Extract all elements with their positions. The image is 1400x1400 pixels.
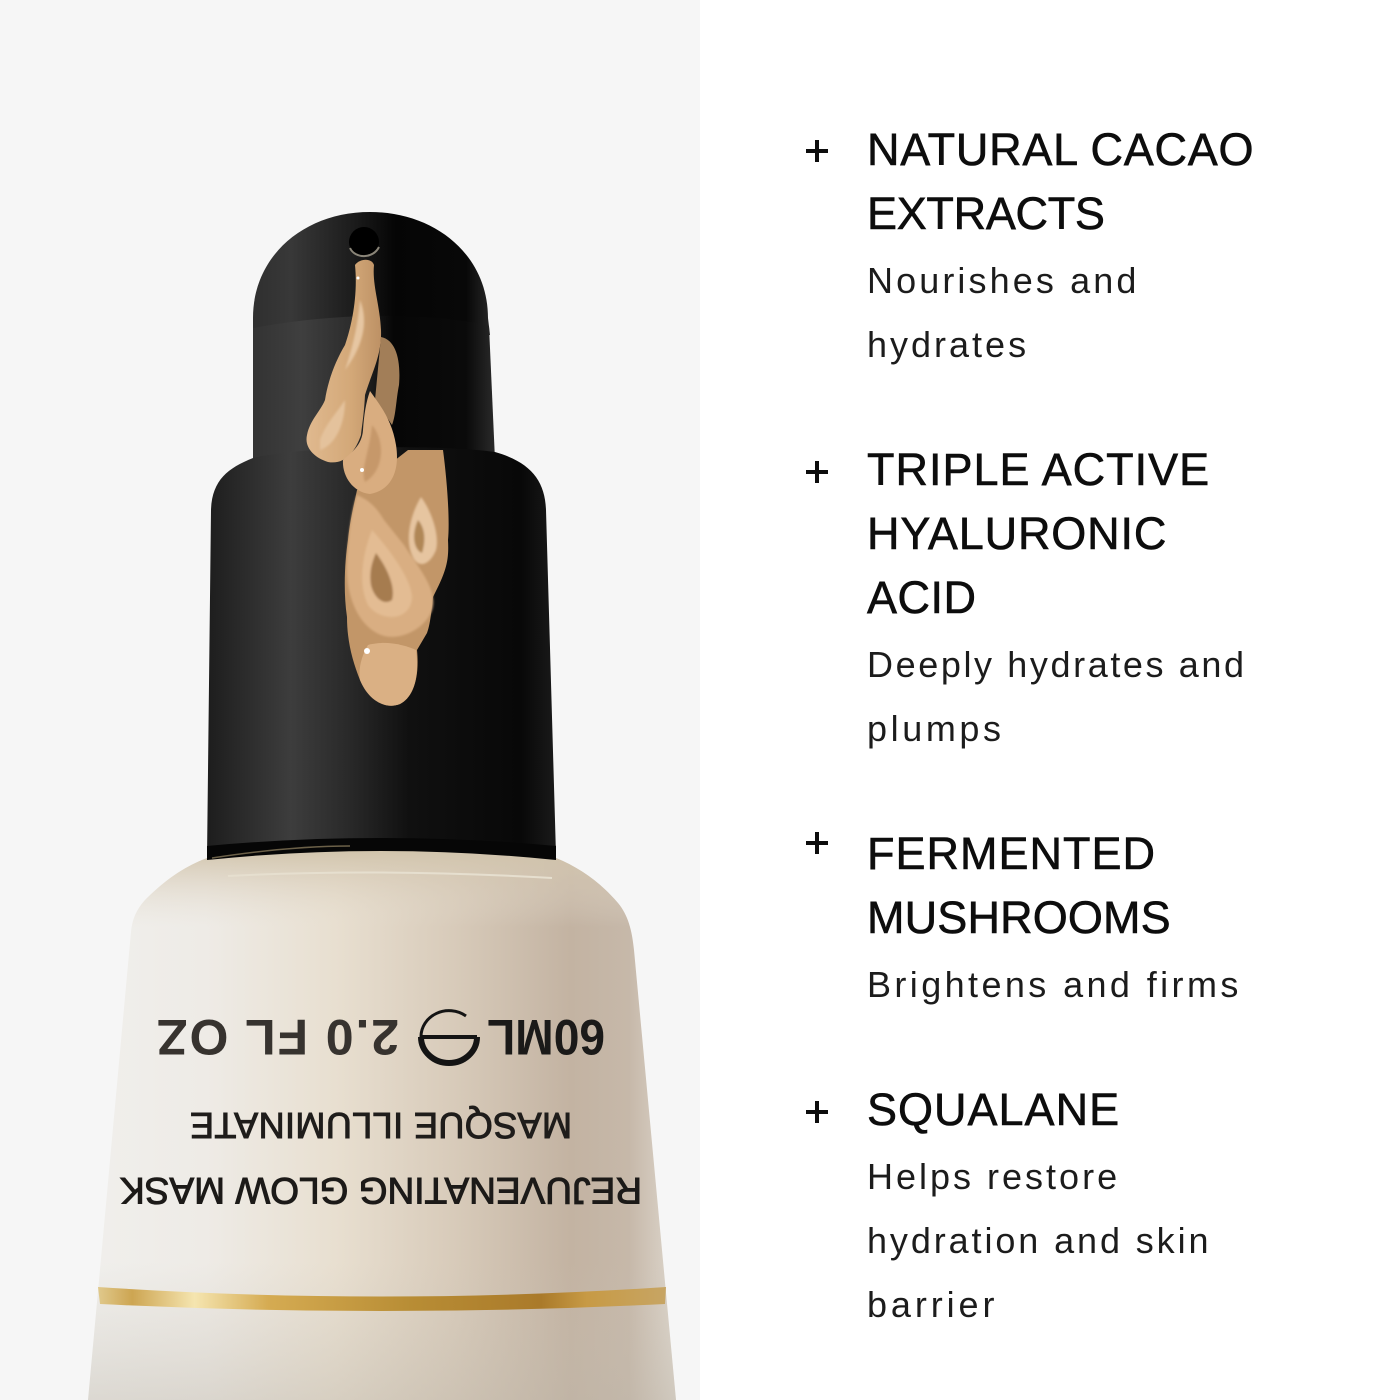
heading: EXTRACTS — [867, 188, 1105, 239]
heading — [867, 828, 1171, 943]
description — [867, 644, 1247, 749]
description — [867, 260, 1139, 365]
description: Helps restore — [867, 1156, 1120, 1197]
background — [0, 0, 700, 1400]
foundation swatch — [307, 260, 449, 706]
nozzle — [349, 227, 379, 257]
pump head — [253, 212, 495, 460]
description: barrier — [867, 1284, 998, 1325]
plus icon — [806, 1101, 828, 1123]
description: Brightens and firms — [867, 964, 1242, 1005]
heading — [867, 124, 1254, 239]
plus icon — [806, 140, 828, 162]
plus icon — [806, 832, 828, 854]
icon: brand logo — [421, 1011, 477, 1063]
panel: product photo — [0, 0, 700, 1400]
description: plumps — [867, 708, 1005, 749]
heading — [866, 444, 1210, 623]
label: masque illuminate: MASQUE ILLUMINATE — [190, 1105, 572, 1146]
label: 60ML: 60ML — [487, 1009, 605, 1065]
heading: ACID — [867, 572, 977, 623]
heading: FERMENTED — [867, 828, 1156, 879]
description — [867, 1156, 1211, 1325]
description: Deeply hydrates and — [867, 644, 1247, 685]
heading: NATURAL CACAO — [867, 124, 1254, 175]
gold band — [98, 1287, 666, 1311]
tube body — [80, 840, 690, 1400]
label: volume: 2.0 FL OZ — [157, 1009, 399, 1065]
heading: TRIPLE ACTIVE — [867, 444, 1210, 495]
heading: HYALURONIC — [867, 508, 1167, 559]
plus icon — [806, 461, 828, 483]
heading: SQUALANE — [867, 1084, 1120, 1135]
description: hydrates — [867, 324, 1029, 365]
description: Nourishes and — [867, 260, 1139, 301]
description: hydration and skin — [867, 1220, 1211, 1261]
pump collar — [207, 447, 556, 860]
label: rejuvenating glow mask: REJUVENATING GLOW MASK — [120, 1170, 642, 1211]
heading: MUSHROOMS — [867, 892, 1171, 943]
